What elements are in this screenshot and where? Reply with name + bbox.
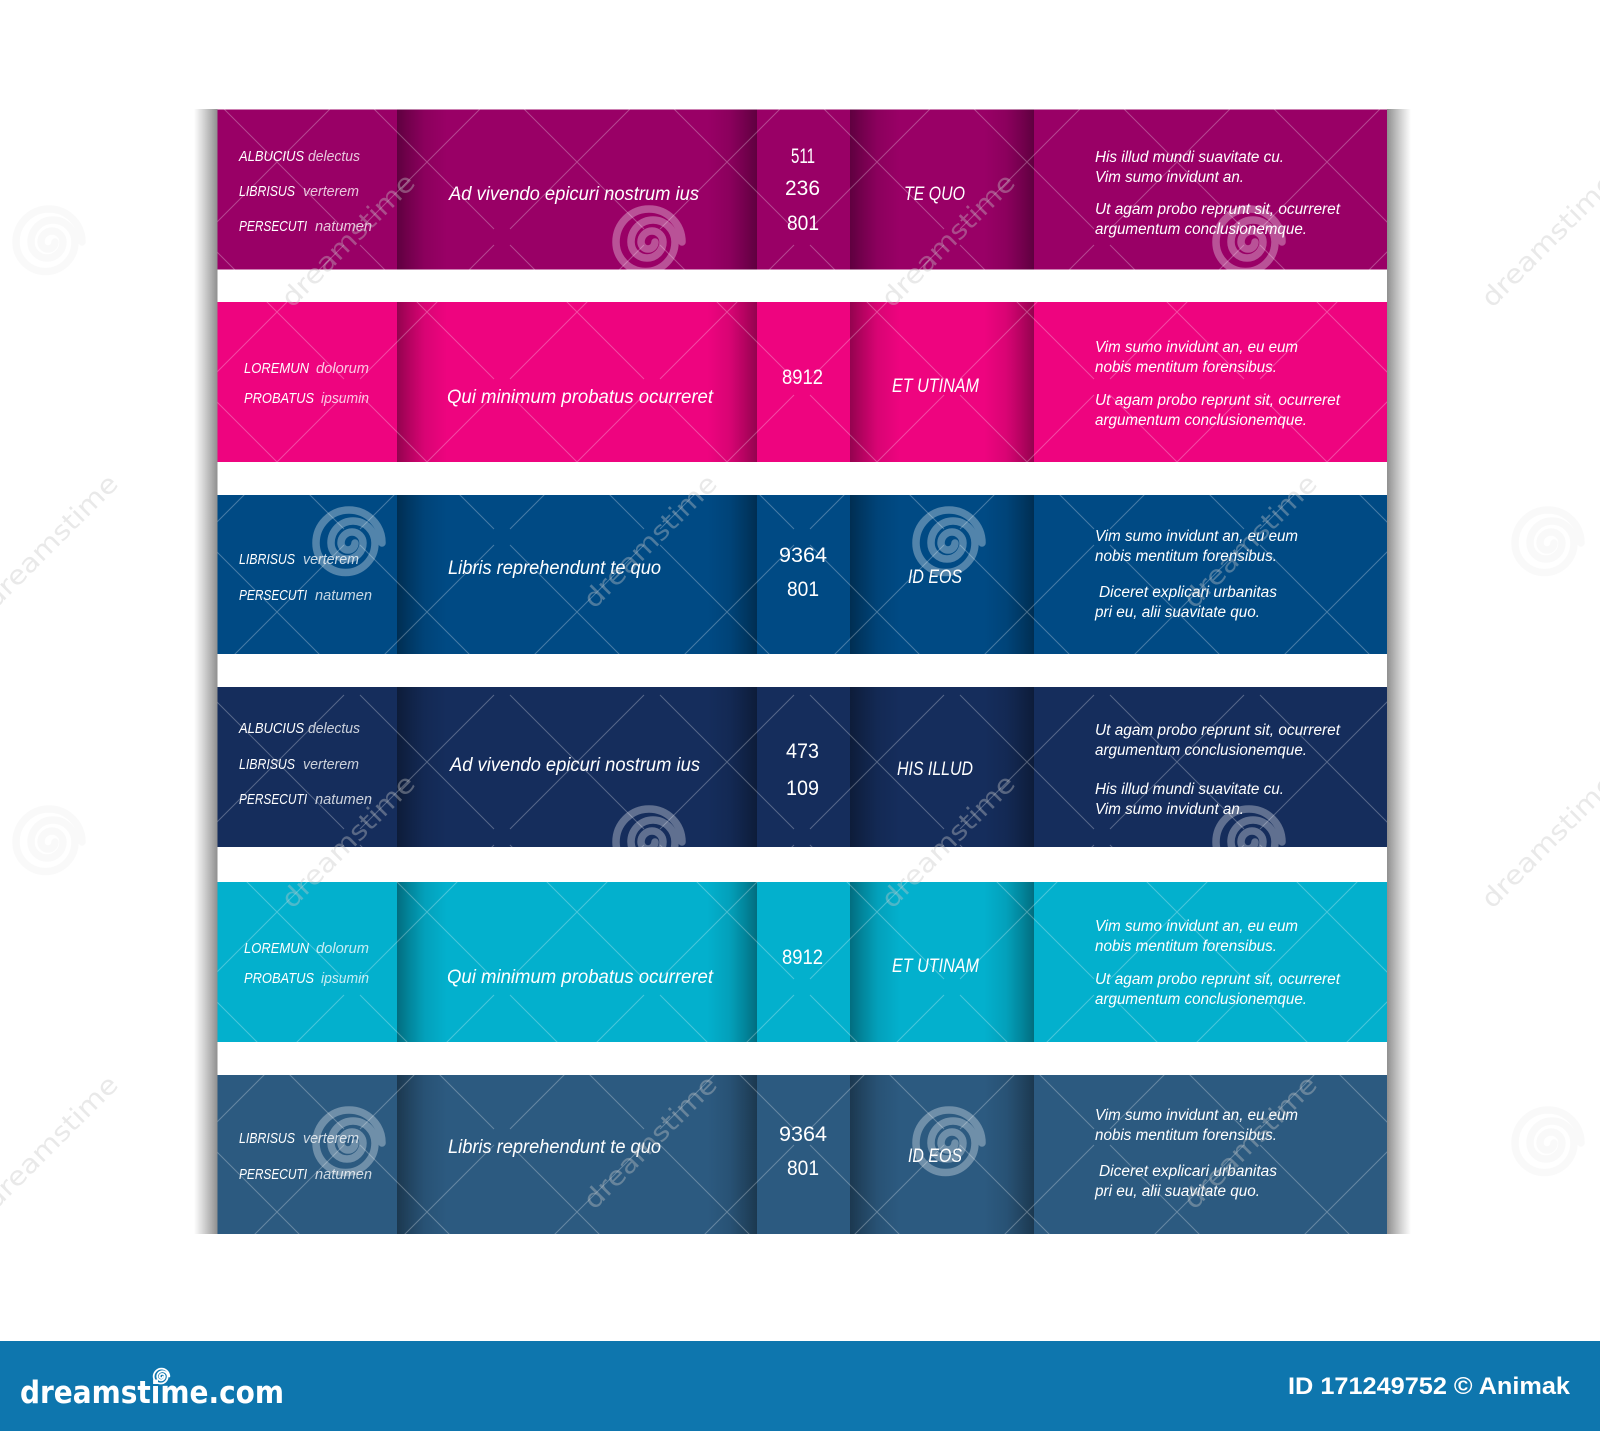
row 2 description: Vim sumo invidunt an, eu eum (1095, 339, 1298, 356)
watermark: dreamstime diagonal text (0, 168, 1600, 1216)
row 5 labels: PROBATUS (244, 970, 314, 987)
row 3 labels: verterem (303, 551, 359, 568)
row 1 description: Ut agam probo reprunt sit, ocurreret (1095, 201, 1341, 218)
row 1: purple (218, 110, 1387, 270)
row 2 title: Qui minimum probatus ocurreret (447, 386, 714, 408)
watermark: cross line pattern (218, 109, 1387, 1234)
watermark: dreamstime diagonal text: dreamstime (876, 769, 1022, 915)
row 5 labels: LOREMUN (244, 940, 309, 957)
row 3 description: pri eu, alii suavitate quo. (1094, 604, 1260, 621)
row 2 labels: ipsumin (321, 390, 369, 407)
row 6 description: Diceret explicari urbanitas (1099, 1163, 1277, 1180)
watermark: dreamstime diagonal text: dreamstime (276, 769, 422, 915)
row 1 numbers: 801 (787, 212, 819, 235)
row 3 description (1094, 528, 1298, 621)
row 6 labels: verterem (303, 1130, 359, 1147)
row 3 description: Vim sumo invidunt an, eu eum (1095, 528, 1298, 545)
row 3 numbers: 801 (787, 578, 819, 601)
row 4: navy (218, 687, 1387, 847)
watermark: dreamstime diagonal text: dreamstime (578, 469, 724, 615)
row 3 labels: LIBRISUS (239, 551, 295, 568)
row 4 category: HIS ILLUD (897, 759, 973, 780)
row 4 title: Ad vivendo epicuri nostrum ius (449, 754, 700, 776)
row 2 description: Ut agam probo reprunt sit, ocurreret (1095, 392, 1341, 409)
row 4 description: Ut agam probo reprunt sit, ocurreret (1095, 722, 1341, 739)
row 2 labels: PROBATUS (244, 390, 314, 407)
row 6 description: pri eu, alii suavitate quo. (1094, 1183, 1260, 1200)
row 5: cyan (218, 882, 1387, 1042)
row 6 description: nobis mentitum forensibus. (1095, 1127, 1277, 1144)
table side shadow: left (194, 109, 218, 1234)
row 1 labels: verterem (303, 183, 359, 200)
row 5 labels (244, 940, 369, 987)
row 4 numbers: 109 (786, 777, 819, 800)
row 6 description: Vim sumo invidunt an, eu eum (1095, 1107, 1298, 1124)
row 1 description: Vim sumo invidunt an. (1095, 169, 1244, 186)
watermark: dreamstime diagonal text: dreamstime (578, 1070, 724, 1216)
row 3 labels: natumen (315, 587, 372, 604)
row 2: magenta (218, 302, 1387, 462)
row 5 description: argumentum conclusionemque. (1095, 991, 1307, 1008)
row 5 description (1095, 918, 1341, 1008)
row 6 description (1094, 1107, 1298, 1200)
row 1 numbers: 236 (785, 177, 820, 200)
row 6 numbers: 9364 (779, 1123, 827, 1146)
watermark: dreamstime diagonal text: dreamstime (276, 168, 422, 314)
row 4 description: argumentum conclusionemque. (1095, 742, 1307, 759)
row 1 description: His illud mundi suavitate cu. (1095, 149, 1284, 166)
watermark: dreamstime diagonal text: dreamstime (1178, 1070, 1324, 1216)
row 6 category: ID EOS (908, 1146, 962, 1167)
row 6 title: Libris reprehendunt te quo (448, 1136, 661, 1158)
row 1 labels: LIBRISUS (239, 183, 295, 200)
row 3 description: Diceret explicari urbanitas (1099, 584, 1277, 601)
row 4 labels: ALBUCIUS (238, 720, 304, 737)
row 4 labels (238, 720, 372, 808)
row 5 number: 8912 (782, 946, 823, 969)
row 4 description: Vim sumo invidunt an. (1095, 801, 1244, 818)
row 2 description: argumentum conclusionemque. (1095, 412, 1307, 429)
footer logo: dreamstime.com: dreamstime.com (20, 1375, 284, 1411)
row 6 labels: LIBRISUS (239, 1130, 295, 1147)
row 4 description (1095, 722, 1341, 818)
watermark: dreamstime diagonal text: dreamstime (876, 168, 1022, 314)
footer image id and credit: ID 171249752 © Animak (1288, 1373, 1571, 1400)
row 6 numbers: 801 (787, 1157, 819, 1180)
row 6 labels: natumen (315, 1166, 372, 1183)
row 2 labels: LOREMUN (244, 360, 309, 377)
row 3 title: Libris reprehendunt te quo (448, 557, 661, 579)
row 2 labels (244, 360, 369, 407)
row 1 title: Ad vivendo epicuri nostrum ius (448, 183, 699, 205)
row 4 labels: LIBRISUS (239, 756, 295, 773)
row 4 numbers: 473 (786, 740, 819, 763)
row 3 category: ID EOS (908, 567, 962, 588)
watermark: spirals (16, 209, 1581, 1172)
row 3 description: nobis mentitum forensibus. (1095, 548, 1277, 565)
row 6: steel blue (218, 1075, 1387, 1234)
row 2 description (1095, 339, 1341, 429)
row 1 labels (238, 148, 372, 235)
row 1 labels: ALBUCIUS (238, 148, 304, 165)
row 3 numbers (779, 544, 827, 601)
row 5 labels: dolorum (316, 940, 369, 957)
row 5 labels: ipsumin (321, 970, 369, 987)
row 5 description: Ut agam probo reprunt sit, ocurreret (1095, 971, 1341, 988)
row 4 numbers (786, 740, 819, 800)
row 1 description (1095, 149, 1341, 238)
watermark: dreamstime diagonal text: dreamstime (1178, 469, 1324, 615)
row 1 labels: delectus (308, 148, 360, 165)
row 1 category: TE QUO (904, 184, 965, 205)
row 6 numbers (779, 1123, 827, 1180)
row 5 description: nobis mentitum forensibus. (1095, 938, 1277, 955)
table side shadow: right (1387, 109, 1411, 1234)
row 4 labels: verterem (303, 756, 359, 773)
row 1 description: argumentum conclusionemque. (1095, 221, 1307, 238)
row 4 description: His illud mundi suavitate cu. (1095, 781, 1284, 798)
row 5 description: Vim sumo invidunt an, eu eum (1095, 918, 1298, 935)
row 1 numbers: 511 (791, 145, 815, 168)
row 2 description: nobis mentitum forensibus. (1095, 359, 1277, 376)
row 1 numbers (785, 145, 820, 235)
row 1 labels: PERSECUTI (239, 218, 307, 235)
row 4 labels: PERSECUTI (239, 791, 307, 808)
row 3 labels (239, 551, 372, 604)
row 2 number: 8912 (782, 366, 823, 389)
row 3: blue (218, 495, 1387, 654)
row 6 labels (239, 1130, 372, 1183)
row 4 labels: natumen (315, 791, 372, 808)
row 5 title: Qui minimum probatus ocurreret (447, 966, 714, 988)
row 3 labels: PERSECUTI (239, 587, 307, 604)
row 6 labels: PERSECUTI (239, 1166, 307, 1183)
footer bar (0, 1341, 1600, 1431)
row 3 numbers: 9364 (779, 544, 827, 567)
row 5 category: ET UTINAM (892, 956, 979, 977)
row 1 labels: natumen (315, 218, 372, 235)
row 2 labels: dolorum (316, 360, 369, 377)
row 2 category: ET UTINAM (892, 376, 979, 397)
row 4 labels: delectus (308, 720, 360, 737)
